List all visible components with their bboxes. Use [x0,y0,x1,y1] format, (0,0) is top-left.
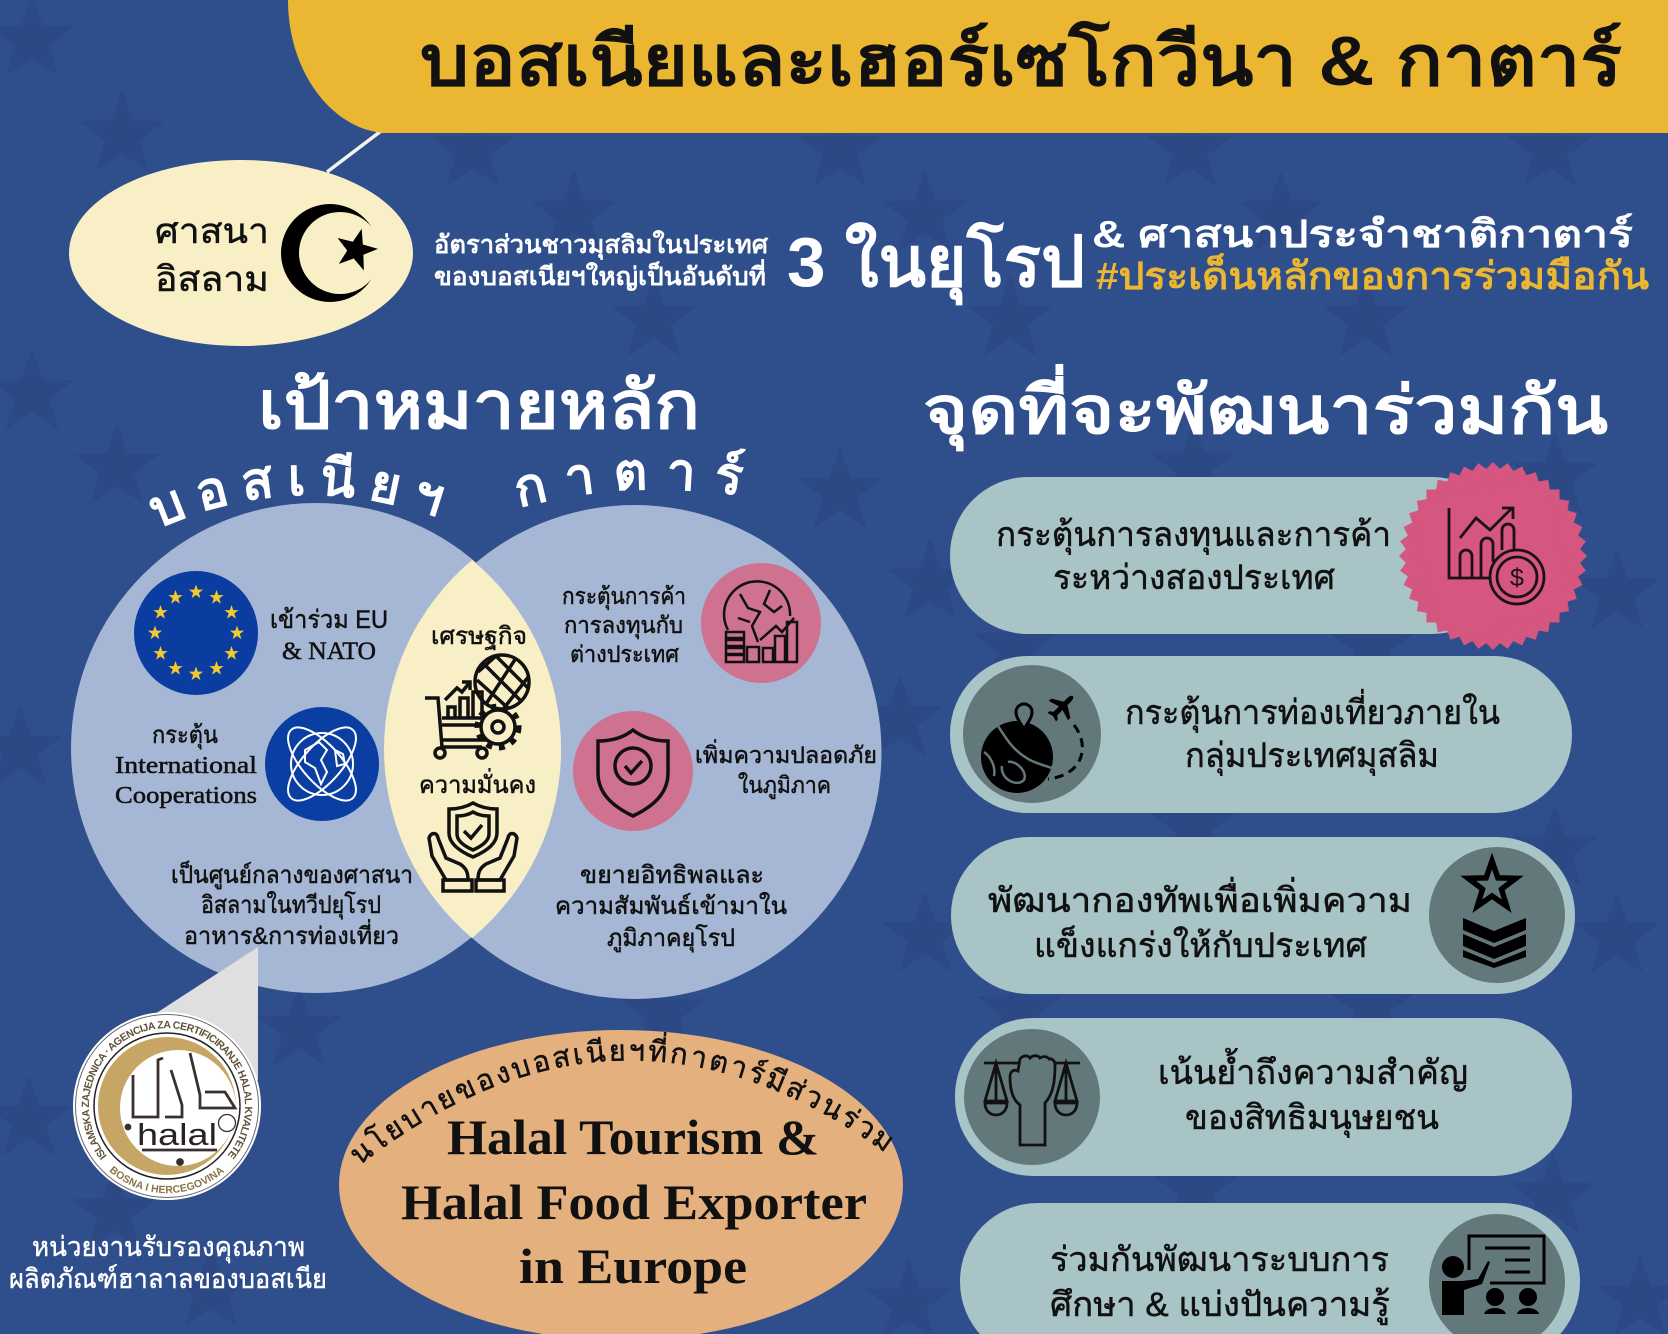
policy headline: in Europe [519,1238,747,1294]
policy headline [401,1109,867,1294]
text: increase regional security: ในภูมิภาค [738,772,831,799]
pill text: ของสิทธิมนุษยชน [1185,1099,1439,1138]
pill: Muslim tourism [950,656,1572,813]
burst badge with finance icon [1399,462,1587,650]
pill text: กลุ่มประเทศมุสลิม [1185,737,1439,776]
pill text: ศึกษา & แบ่งปันความรู้ [1050,1286,1390,1325]
connector line from banner to religion oval [327,131,381,172]
curved policy label: นโยบายของบอสเนียฯที่กาตาร์มีส่วนร่วม [351,1032,893,1164]
text: Islamic centre in Europe: เป็นศูนย์กลางของศาสนา [171,860,413,890]
text: expand influence in Europe: ความสัมพันธ์เข้ามาใน [555,892,787,920]
pill text [996,516,1391,597]
venn diagram [71,503,882,999]
caption: Bosnian halal certification agency: หน่วยงานรับรองคุณภาพ [32,1232,305,1264]
halal logo mark: halal [137,1117,217,1152]
callout pointer to halal seal [138,947,258,1080]
curved label: Qatar: กาตาร์ [516,448,746,508]
icon: EU flag [134,571,258,695]
rank highlight: 3 ในยุโรป [787,221,1085,306]
Muslim population ranking text: ของบอสเนียฯใหญ่เป็นอันดับที่ [434,259,766,291]
icon: fist and justice scales [964,1029,1100,1165]
pill: military strength [951,837,1575,994]
title banner [288,0,1668,133]
Muslim population ranking text: อัตราส่วนชาวมุสลิมในประเทศ [434,229,769,261]
text: stimulate international cooperations: กระตุ้น [152,722,218,750]
curved label: Bosnia: บอสเนียฯ [150,452,444,526]
pill text: เน้นย้ำถึงความสำคัญ [1158,1048,1468,1092]
text: increase regional security [695,739,877,799]
pill text [1125,689,1500,776]
pill text: กระตุ้นการลงทุนและการค้า [996,516,1391,555]
key cooperation hashtag: #ประเด็นหลักของการร่วมมือกัน [1096,253,1649,298]
religion label: อิสลาม [155,260,269,299]
text: expand influence in Europe [555,862,787,953]
text: stimulate trade and foreign investment: กระตุ้นการค้า [562,583,686,610]
pill text: แข็งแกร่งให้กับประเทศ [1034,925,1367,965]
icon: globe with orbits [265,707,379,821]
burst badge with finance icon: $ [1510,564,1524,592]
text: stimulate international cooperations [115,722,257,809]
text: increase regional security: เพิ่มความปลอดภัย [695,739,877,768]
icon: economy cart, globe and gear [425,655,529,758]
text: stimulate trade and foreign investment: ต่างประเทศ [570,641,679,667]
icon: security shield [573,711,693,831]
pill text [988,877,1412,965]
seal ring text bottom: BOSNA I HERCEGOVINA [110,1166,224,1194]
label: economy: เศรษฐกิจ [431,623,527,650]
text: Islamic centre in Europe: อาหาร&การท่องเที่ยว [184,919,399,950]
text: Islamic centre in Europe [171,860,413,950]
caption: Bosnian halal certification agency: ผลิตภัณฑ์ฮาลาลของบอสเนีย [9,1263,327,1294]
policy headline: Halal Food Exporter [401,1174,867,1230]
religion label: ศาสนา [155,212,269,251]
Muslim population ranking text [434,229,769,291]
pill text: ร่วมกันพัฒนาระบบการ [1050,1241,1389,1279]
pill: investment and trade [950,462,1587,650]
text: join EU and NATO [270,606,388,665]
religion label [155,212,269,299]
icon: military rank [1429,847,1565,983]
icon: travel globe and plane [963,665,1101,803]
religion oval [69,160,413,346]
halal certification seal [73,1012,261,1200]
heading: main goals: เป้าหมายหลัก [258,368,700,442]
caption: Bosnian halal certification agency [9,1232,327,1294]
pill text [1050,1241,1390,1325]
text: expand influence in Europe: ขยายอิทธิพลและ [580,862,764,889]
icon: teacher and board [1429,1214,1565,1334]
state religion text: & ศาสนาประจำชาติกาตาร์ [1092,213,1634,256]
text: join EU and NATO: เข้าร่วม EU [270,606,388,634]
pill: education and knowledge [960,1203,1580,1334]
pill text: กระตุ้นการท่องเที่ยวภายใน [1125,689,1500,733]
text: stimulate trade and foreign investment [562,583,686,667]
title: บอสเนียและเฮอร์เซโกวีนา & กาตาร์ [420,20,1622,100]
text: stimulate international cooperations: International [115,753,257,779]
pill: human rights [955,1018,1572,1176]
icon: world investment [701,563,821,683]
policy headline: Halal Tourism & [447,1109,819,1165]
text: Islamic centre in Europe: อิสลามในทวีปยุโรป [201,891,381,920]
text: expand influence in Europe: ภูมิภาคยุโรป [607,924,735,953]
label: security: ความมั่นคง [419,768,536,799]
pill text: ระหว่างสองประเทศ [1053,559,1335,597]
heading: areas to develop together: จุดที่จะพัฒนาร่วมกัน [923,363,1608,452]
text: join EU and NATO: & NATO [282,638,376,665]
seal ring text top: ISLAMSKA ZAJEDNICA · AGENCIJA ZA CERTIFICIRANJE HALAL KVALITETE [82,1020,252,1160]
pill text [1158,1048,1468,1138]
icon: crescent and star [281,204,382,302]
halal logo mark [126,1053,236,1164]
text: stimulate trade and foreign investment: การลงทุนกับ [564,612,683,639]
icon: hands holding shield [429,803,517,891]
pill text: พัฒนากองทัพเพื่อเพิ่มความ [988,877,1412,920]
text: stimulate international cooperations: Cooperations [115,783,257,809]
halal policy oval [339,1030,903,1334]
